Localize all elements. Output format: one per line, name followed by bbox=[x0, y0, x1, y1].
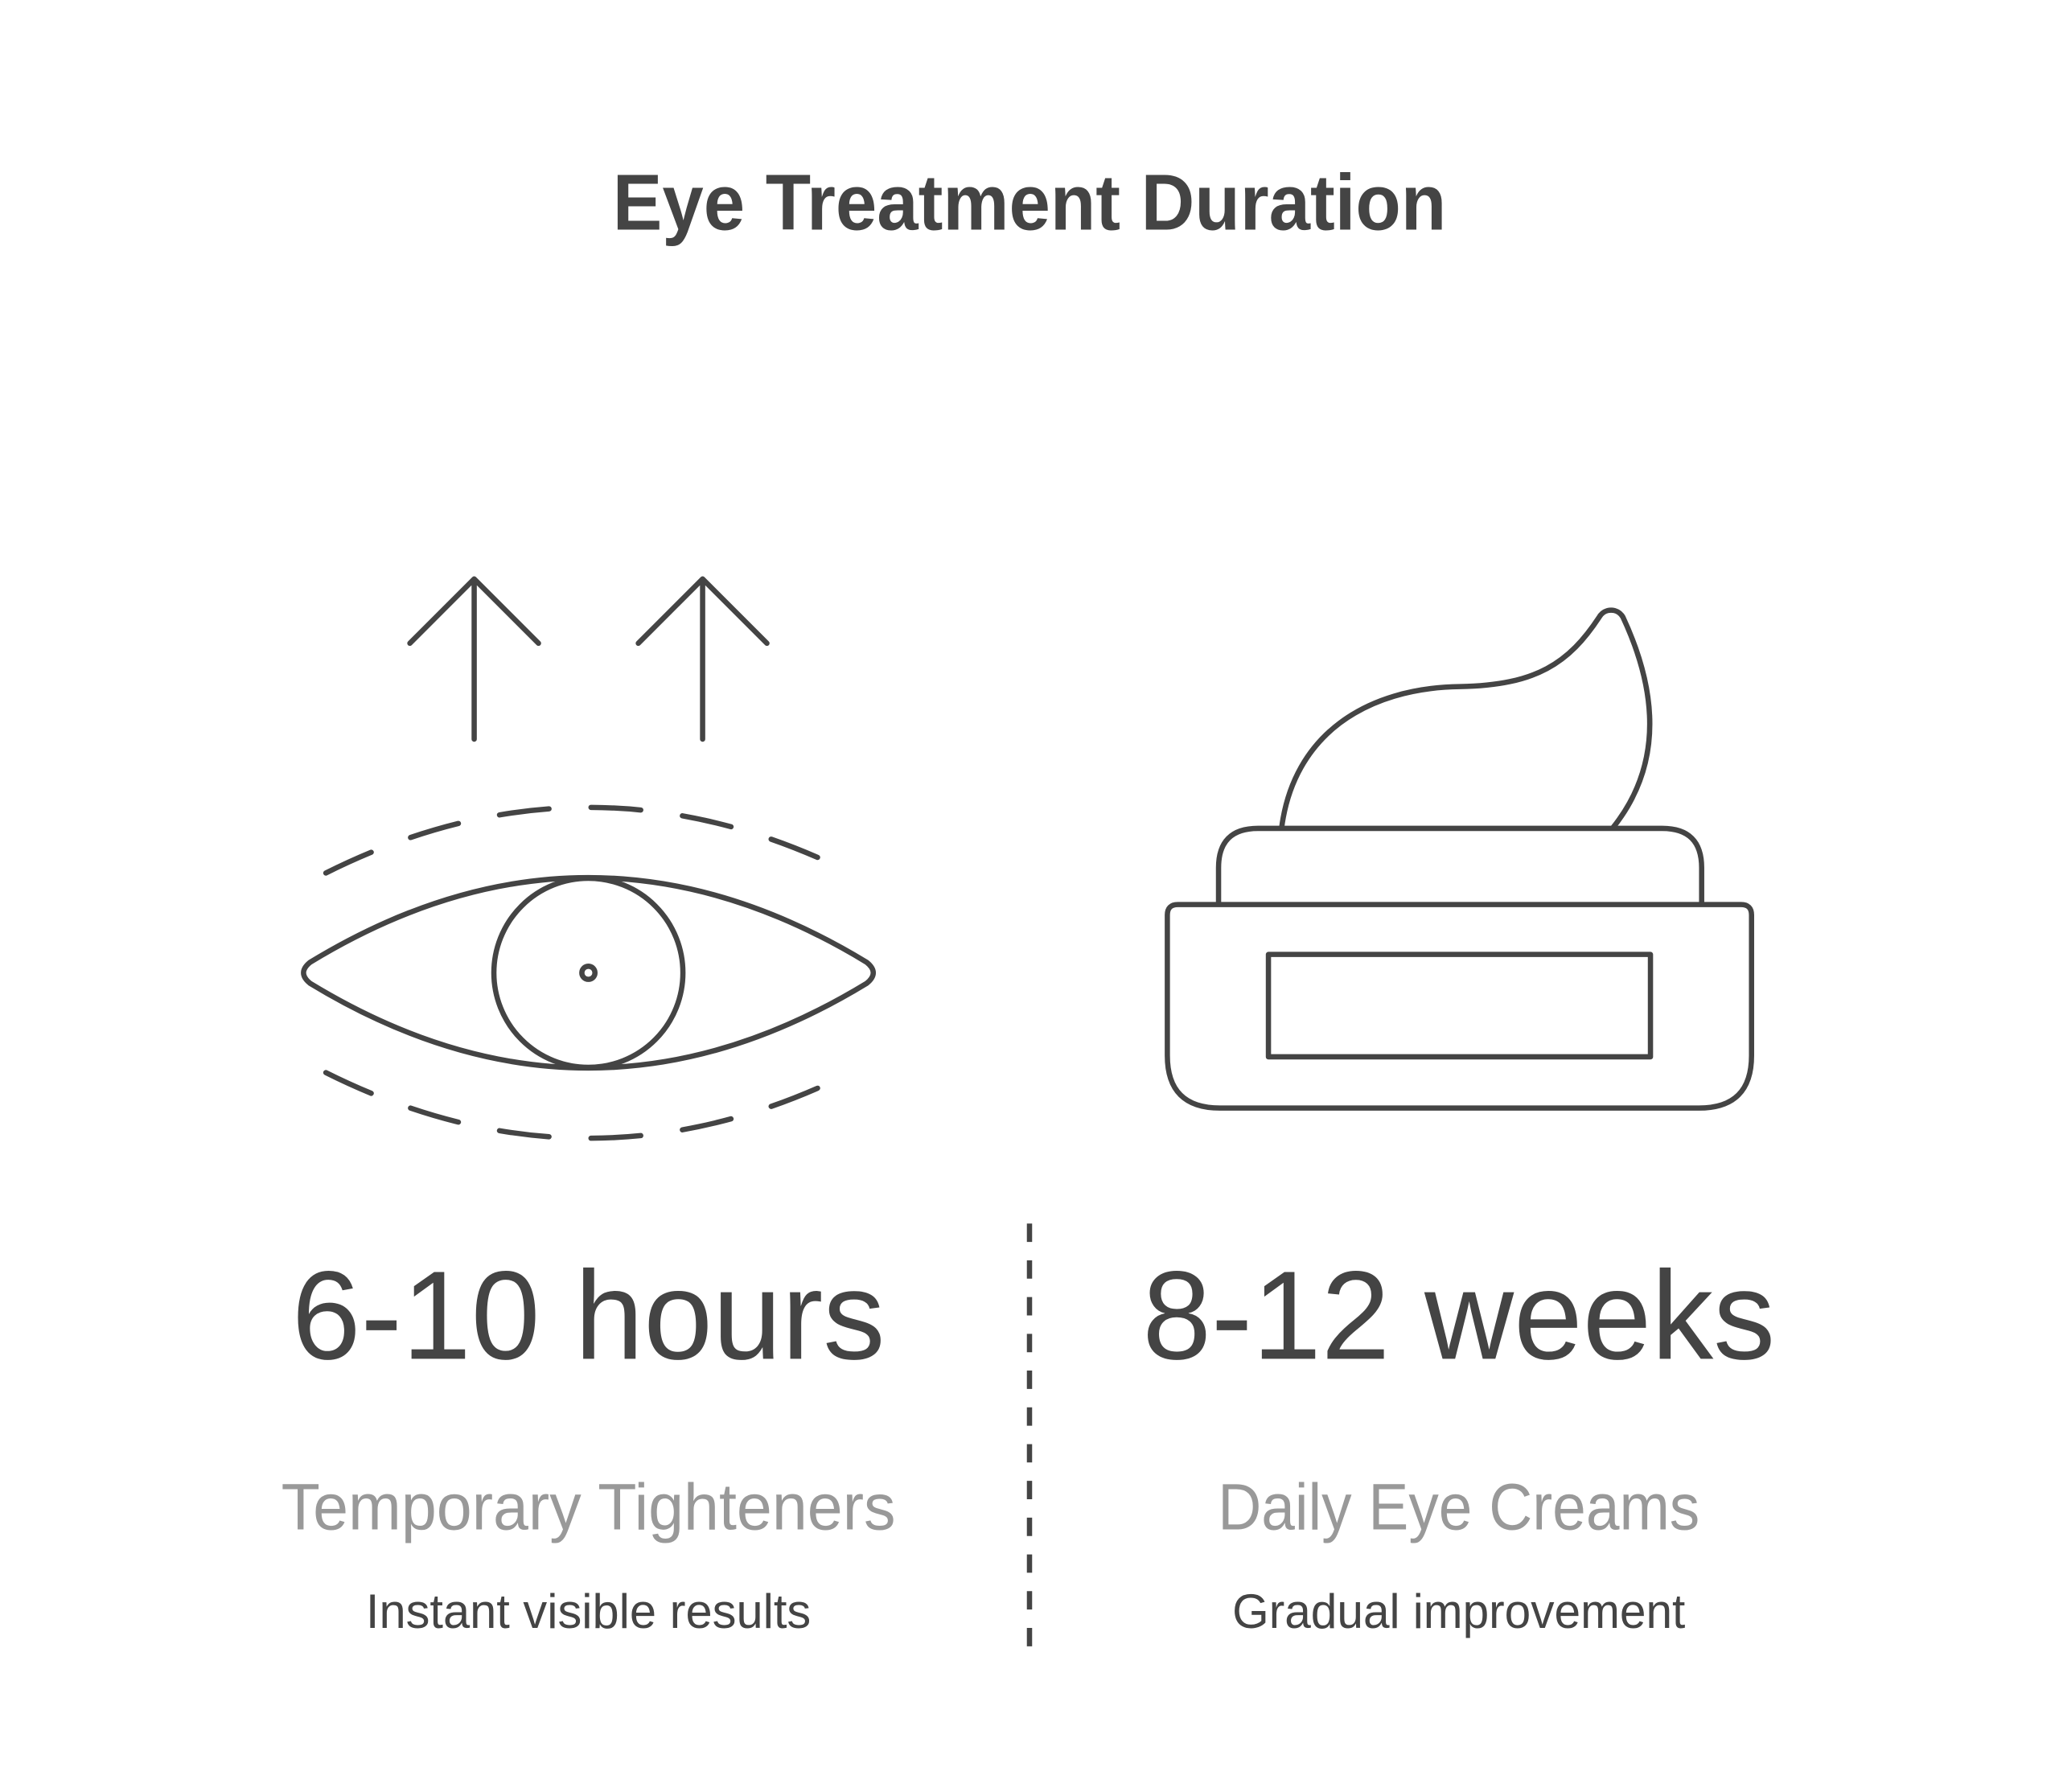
title: Eye Treatment Duration bbox=[613, 158, 1446, 247]
left column text: 6-10 hours bbox=[292, 1245, 885, 1386]
left column text bbox=[282, 1245, 896, 1638]
icon: up arrows bbox=[410, 579, 767, 739]
icon: eye bbox=[303, 808, 873, 1138]
right column text: Daily Eye Creams bbox=[1218, 1471, 1699, 1544]
left column text: Temporary Tighteners bbox=[282, 1471, 896, 1544]
right column text: 8-12 weeks bbox=[1142, 1245, 1775, 1386]
divider bbox=[1028, 1223, 1031, 1661]
left column text: Instant visible results bbox=[366, 1584, 811, 1638]
right column text bbox=[1142, 1245, 1775, 1638]
icon: cream jar bbox=[1167, 610, 1752, 1108]
right column text: Gradual improvement bbox=[1232, 1584, 1686, 1638]
